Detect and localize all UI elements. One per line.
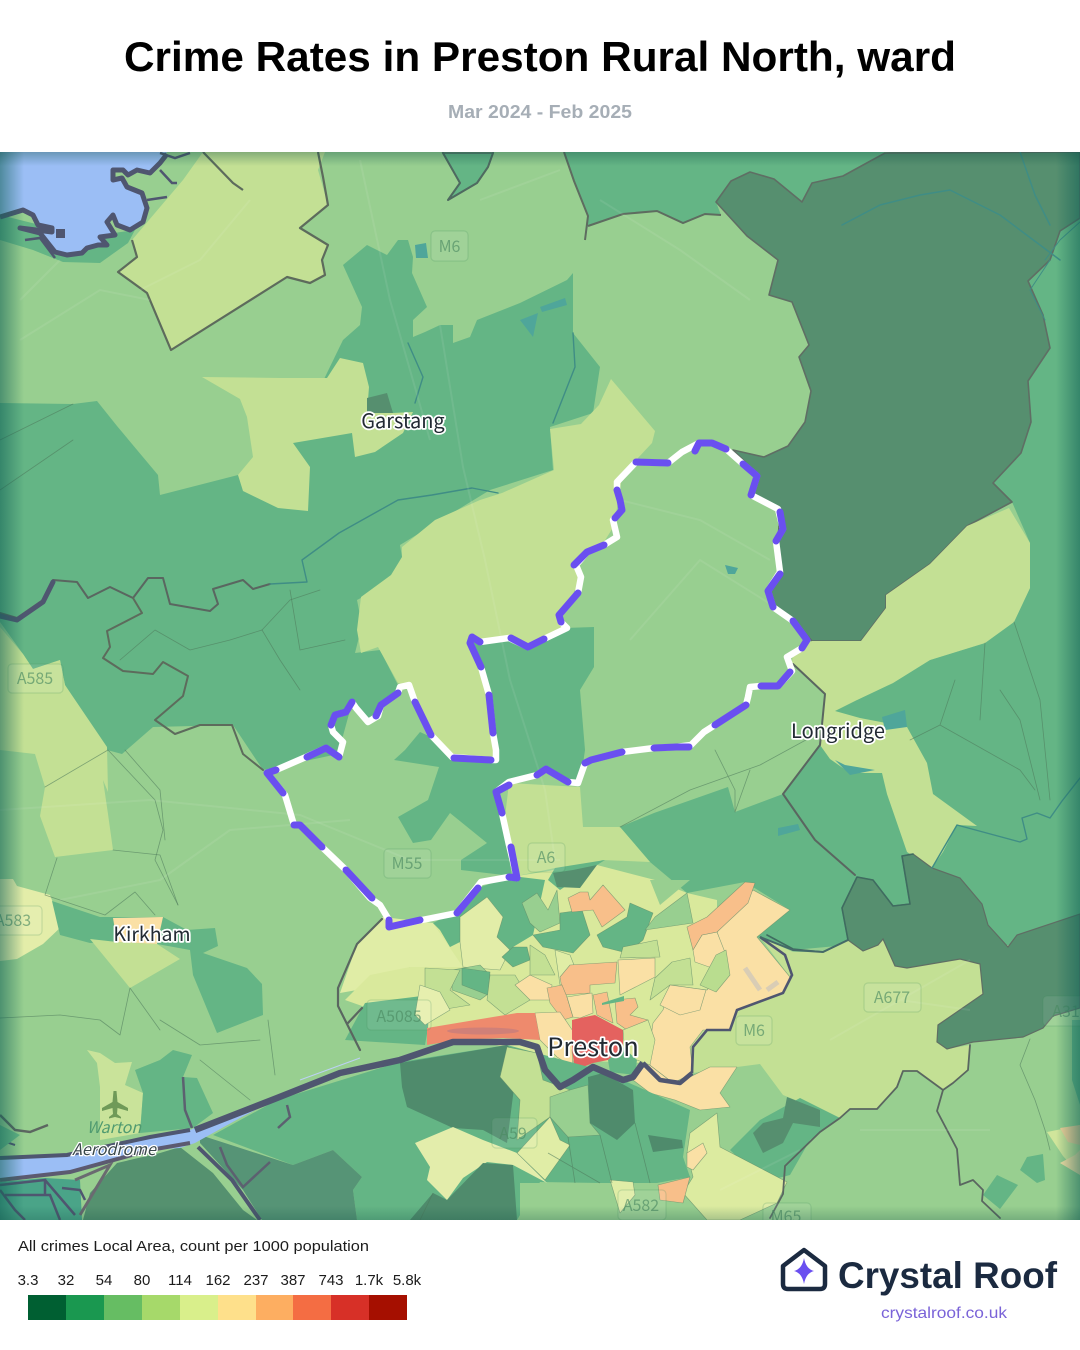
legend values: 32 xyxy=(58,1272,74,1289)
road shields: M65 xyxy=(771,1203,801,1227)
road shields: M6 xyxy=(439,233,461,257)
left-side yellow district A585 xyxy=(0,627,113,857)
yellow district around Garstang xyxy=(202,358,413,511)
subtitle: date range: Mar 2024 - Feb 2025 xyxy=(448,102,632,122)
place label: Longridge: Longridge xyxy=(791,715,885,744)
thin ward lines xyxy=(620,735,815,827)
icon: house with star xyxy=(783,1250,825,1289)
road shields: A6 xyxy=(537,844,555,868)
sea, north-west xyxy=(0,152,190,263)
road shields: A585 xyxy=(17,665,53,689)
yellow district north of the ward xyxy=(357,379,655,758)
legend values: 80 xyxy=(134,1272,150,1289)
legend values: 743 xyxy=(318,1272,344,1289)
road shields xyxy=(0,231,1080,1233)
peach ward south of river xyxy=(633,1063,737,1110)
ward boundary: Preston Rural North xyxy=(267,443,807,927)
river Ribble and estuary xyxy=(0,937,848,1220)
road shields: A582 xyxy=(623,1192,659,1216)
place label: Preston: Preston xyxy=(547,1027,639,1064)
pale district A583 xyxy=(0,879,62,961)
legend title: All crimes Local Area, count per 1000 population xyxy=(18,1238,369,1255)
website: crystalroof.co.uk xyxy=(881,1305,1008,1322)
south-west marshes xyxy=(0,1115,110,1220)
Kirkham districts xyxy=(52,901,263,1033)
river Wyre xyxy=(0,578,270,618)
south bank districts xyxy=(83,1045,855,1220)
central mid-green inside ward notch xyxy=(394,627,594,876)
mid-green district east xyxy=(620,218,1080,950)
Preston urban wards xyxy=(340,860,790,1110)
place label: Warton Aerodrome: Aerodrome xyxy=(72,1136,158,1160)
yellow district A6 corridor xyxy=(505,783,650,876)
legend values: 162 xyxy=(205,1272,231,1289)
dark district north-east xyxy=(716,152,1080,641)
south-east yellow district xyxy=(690,937,983,1118)
grey patch on peach ward xyxy=(745,968,778,990)
district boundary south-west xyxy=(338,919,382,1050)
lakes xyxy=(415,243,907,836)
top boundary xyxy=(443,153,493,200)
yellow district north-east of Longridge xyxy=(792,508,1030,868)
logo: Crystal Roof xyxy=(783,1250,1058,1322)
yellow district, north-west xyxy=(118,152,328,350)
legend colour scale xyxy=(28,1295,407,1320)
place label: Warton Aerodrome: Warton xyxy=(87,1114,142,1138)
district boundary south-east xyxy=(783,664,855,875)
legend values: 387 xyxy=(280,1272,306,1289)
district boundary west xyxy=(103,598,263,770)
road shields: A677 xyxy=(874,984,910,1008)
legend values: 3.3 xyxy=(18,1272,38,1289)
mid-green district west and centre xyxy=(0,240,600,770)
legend xyxy=(18,1238,422,1320)
road shields: A31 xyxy=(1052,998,1080,1022)
low-crime north band xyxy=(565,152,884,230)
central hot wards xyxy=(560,962,617,995)
road shields: M6 xyxy=(743,1017,765,1041)
brand name: Crystal Roof xyxy=(838,1255,1058,1296)
legend values: 54 xyxy=(96,1272,112,1289)
title: Crime Rates in Preston Rural North, ward xyxy=(124,33,956,80)
dark district south-east xyxy=(842,854,1080,1049)
legend values: 1.7k xyxy=(355,1272,384,1289)
place label: Garstang: Garstang xyxy=(361,405,445,434)
road shields: A59 xyxy=(499,1120,527,1144)
road shields: A5085 xyxy=(376,1003,422,1027)
south-west pale ward xyxy=(340,917,463,993)
map vignette xyxy=(0,152,1080,1220)
Warton pale district xyxy=(87,1050,143,1140)
road shields: M55 xyxy=(392,850,422,874)
legend values: 5.8k xyxy=(393,1272,422,1289)
icon: airport plane xyxy=(102,1091,128,1118)
roads xyxy=(58,200,970,1170)
boundary lines and rivers xyxy=(0,152,1080,1218)
legend values xyxy=(18,1272,422,1289)
dark patch beside Garstang xyxy=(367,393,393,413)
legend values: 237 xyxy=(243,1272,269,1289)
teal rivers xyxy=(842,152,1060,260)
south-east corner patches xyxy=(983,1020,1080,1209)
peach wards east of Preston xyxy=(647,890,790,1083)
place label: Kirkham: Kirkham xyxy=(113,918,191,947)
place label: Warton Aerodrome xyxy=(72,1114,158,1160)
legend values: 114 xyxy=(168,1272,192,1289)
